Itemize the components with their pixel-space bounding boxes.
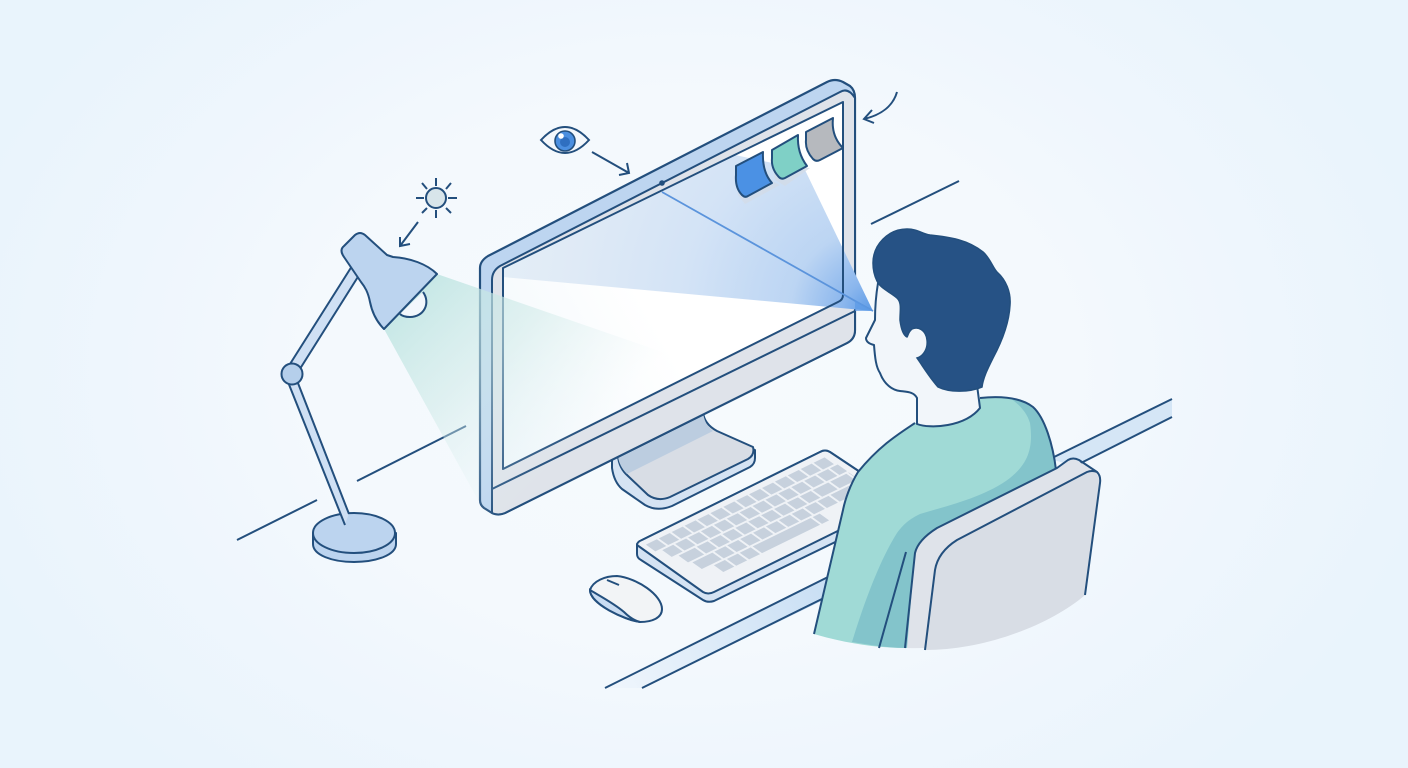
arrow: eye to webcam [592,152,629,175]
keyboard top [637,450,860,594]
shirt outline [814,397,1056,634]
sun icon [416,178,457,218]
chin line [492,311,855,489]
lamp light beam [384,274,700,540]
desk right edge [1050,399,1172,466]
monitor shell and side strip [480,80,855,514]
desk front edge [605,576,830,688]
shirt fold [879,552,906,648]
monitor screen [503,102,843,469]
gaze origin over bezel [855,300,873,311]
mouse [590,576,662,622]
colour swatches [736,118,843,204]
keycaps [651,460,876,580]
eye icon [541,127,589,153]
lamp shade [342,233,437,329]
swatch shadows [737,165,810,204]
lamp bulb [400,292,426,317]
shirt shadow [852,398,1056,648]
lamp lower arm [288,378,349,525]
gray swatch [806,118,843,161]
face and neck [866,283,980,426]
desk lamp [282,233,437,562]
gaze line [662,192,873,311]
chair outlines [905,458,1100,650]
hair [873,229,1010,391]
blue swatch [736,152,772,197]
monitor [480,80,855,514]
lamp joint [282,364,302,384]
green swatch [772,135,807,179]
webcam [659,180,665,186]
keyboard [637,450,876,602]
arrow: curved to monitor corner [864,92,897,123]
chair side [907,458,1100,648]
arrow: sun to lamp [400,222,418,246]
monitor stand [612,412,755,509]
shirt [814,397,1056,648]
person [814,229,1056,648]
lamp base [313,513,396,562]
chair back panel [925,472,1100,650]
monitor front bezel [492,90,855,514]
desk back edge lines [237,181,959,540]
keyboard body [637,450,860,602]
screen outline over wedge [503,102,843,469]
lamp upper arm [290,266,361,372]
chair [905,458,1100,650]
gaze wedge on screen [503,155,873,311]
